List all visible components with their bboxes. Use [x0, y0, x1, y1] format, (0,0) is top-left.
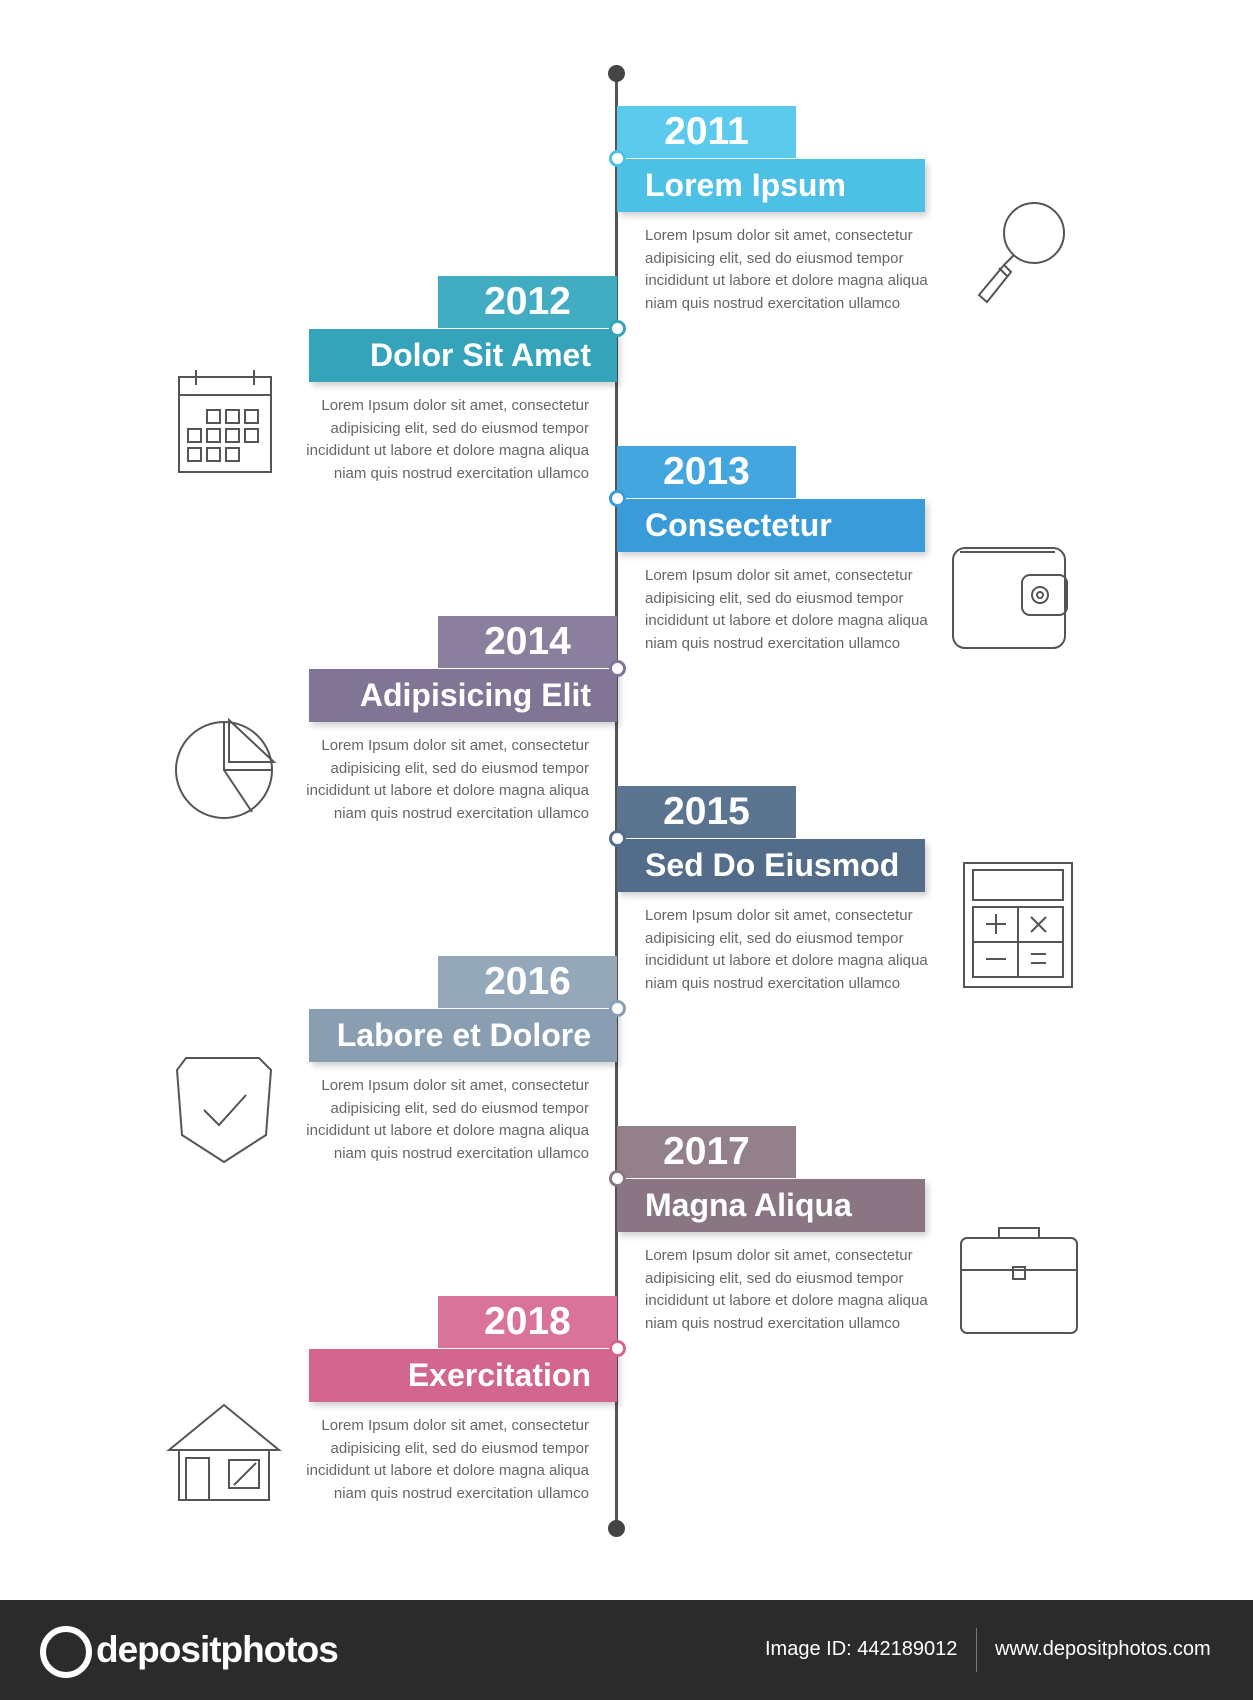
footer logo: depositphotos [96, 1629, 338, 1670]
item 2015 [609, 786, 930, 992]
item 2011: Lorem Ipsum [645, 167, 846, 203]
item 2018: Lorem Ipsum dolor sit amet, consectetur [321, 1417, 589, 1434]
item 2011: niam quis nostrud exercitation ullamco [645, 295, 900, 312]
item 2016: Labore et Dolore [337, 1017, 591, 1053]
item 2011: adipisicing elit, sed do eiusmod tempor [645, 250, 903, 267]
item 2014 [306, 616, 626, 822]
item 2017 [609, 1126, 930, 1332]
icon: magnifier [978, 202, 1065, 304]
item 2014: Lorem Ipsum dolor sit amet, consectetur [321, 737, 589, 754]
item 2012: 2012 [484, 280, 571, 323]
item 2012: adipisicing elit, sed do eiusmod tempor [331, 420, 589, 437]
item 2011 [609, 106, 930, 312]
item 2017: 2017 [663, 1130, 750, 1173]
item 2011: 2011 [664, 110, 749, 153]
item 2016 [306, 956, 626, 1162]
item 2011: Lorem Ipsum dolor sit amet, consectetur [645, 227, 913, 244]
item 2013: adipisicing elit, sed do eiusmod tempor [645, 590, 903, 607]
icon: calculator [963, 862, 1073, 988]
item 2015: incididunt ut labore et dolore magna aliqua [645, 952, 928, 969]
item 2015: niam quis nostrud exercitation ullamco [645, 975, 900, 992]
item 2016: 2016 [484, 960, 571, 1003]
timeline line [615, 73, 618, 1528]
item 2014: Adipisicing Elit [360, 677, 591, 713]
item 2016: incididunt ut labore et dolore magna aliqua [306, 1122, 589, 1139]
item 2012: Lorem Ipsum dolor sit amet, consectetur [321, 397, 589, 414]
item 2016: adipisicing elit, sed do eiusmod tempor [331, 1100, 589, 1117]
footer image id: Image ID: 442189012 [765, 1638, 957, 1660]
item 2012: incididunt ut labore et dolore magna aliqua [306, 442, 589, 459]
footer [0, 1600, 1253, 1700]
item 2013: niam quis nostrud exercitation ullamco [645, 635, 900, 652]
timeline bottom dot [608, 1520, 625, 1537]
item 2018: adipisicing elit, sed do eiusmod tempor [331, 1440, 589, 1457]
item 2012: Dolor Sit Amet [370, 337, 591, 373]
item 2013: incididunt ut labore et dolore magna aliqua [645, 612, 928, 629]
item 2015: adipisicing elit, sed do eiusmod tempor [645, 930, 903, 947]
item 2011: incididunt ut labore et dolore magna aliqua [645, 272, 928, 289]
item 2014: adipisicing elit, sed do eiusmod tempor [331, 760, 589, 777]
icon: briefcase [960, 1227, 1078, 1334]
icon: shield [176, 1057, 272, 1164]
item 2014: niam quis nostrud exercitation ullamco [334, 805, 589, 822]
item 2016: niam quis nostrud exercitation ullamco [334, 1145, 589, 1162]
item 2017: adipisicing elit, sed do eiusmod tempor [645, 1270, 903, 1287]
icon: calendar [178, 370, 272, 473]
item 2017: niam quis nostrud exercitation ullamco [645, 1315, 900, 1332]
item 2013 [609, 446, 930, 652]
item 2012: niam quis nostrud exercitation ullamco [334, 465, 589, 482]
item 2015: 2015 [663, 790, 750, 833]
item 2018 [306, 1296, 626, 1502]
item 2018: incididunt ut labore et dolore magna aliqua [306, 1462, 589, 1479]
item 2015: Lorem Ipsum dolor sit amet, consectetur [645, 907, 913, 924]
item 2017: Lorem Ipsum dolor sit amet, consectetur [645, 1247, 913, 1264]
item 2014: 2014 [484, 620, 571, 663]
item 2015: Sed Do Eiusmod [645, 847, 899, 883]
item 2017: incididunt ut labore et dolore magna aliqua [645, 1292, 928, 1309]
icon: pie chart [175, 718, 276, 819]
item 2016: Lorem Ipsum dolor sit amet, consectetur [321, 1077, 589, 1094]
item 2018: niam quis nostrud exercitation ullamco [334, 1485, 589, 1502]
item 2013: 2013 [663, 450, 750, 493]
timeline top dot [608, 65, 625, 82]
item 2012 [306, 276, 626, 482]
footer logo [40, 1626, 338, 1678]
icon: wallet [952, 547, 1068, 649]
item 2018: Exercitation [408, 1357, 591, 1393]
item 2017: Magna Aliqua [645, 1187, 852, 1223]
item 2013: Consectetur [645, 507, 832, 543]
footer url: www.depositphotos.com [995, 1638, 1211, 1660]
item 2018: 2018 [484, 1300, 571, 1343]
item 2014: incididunt ut labore et dolore magna aliqua [306, 782, 589, 799]
icon: house [166, 1404, 282, 1501]
item 2013: Lorem Ipsum dolor sit amet, consectetur [645, 567, 913, 584]
